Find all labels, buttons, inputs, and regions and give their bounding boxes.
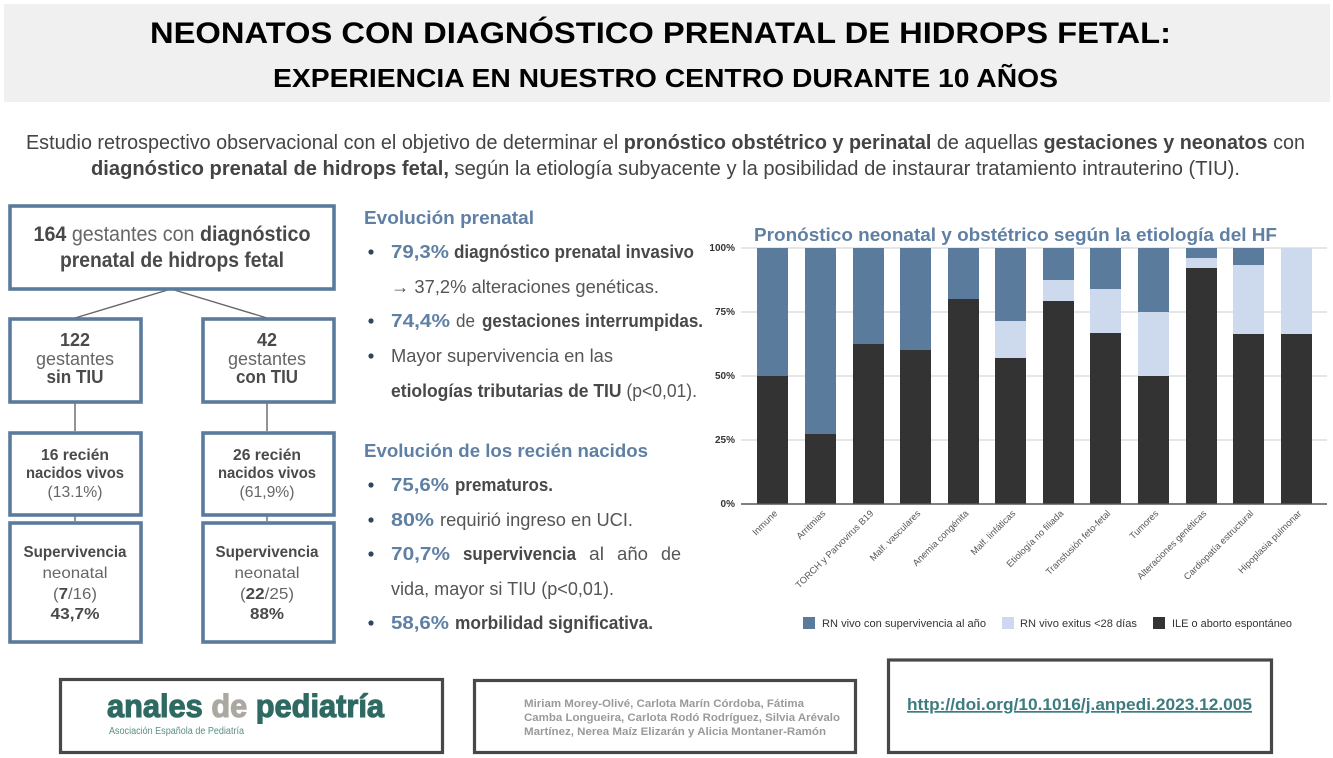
legend [803,617,1292,630]
x axis category labels: Anemia congénita [911,508,971,568]
box: supervivencia con TIU [203,523,334,642]
box: 122 sin TIU: gestantes [36,349,114,369]
box: supervivencia con TIU: (22/25) [240,586,294,603]
x axis category labels: Inmune [750,508,779,537]
heading: evolución recién nacidos: Evolución de los recién nacidos [364,441,648,461]
y axis and gridlines: 75% [715,307,735,318]
bullet list: recién nacidos: 58,6% [391,613,449,633]
legend: ILE o aborto espontáneo [1172,618,1292,630]
x axis category labels [750,508,1303,590]
x axis category labels: Tumores [1128,508,1161,541]
bullet list: prenatal: etiologías tributarias de TIU (p<0,01). [391,381,697,401]
y axis and gridlines [709,243,1327,510]
box: supervivencia sin TIU: neonatal [42,565,108,582]
bullet list: prenatal: Mayor supervivencia en las [391,346,613,366]
stacked bars [757,248,1312,504]
panel: stacked bar chart [709,225,1327,630]
box: 42 con TIU: con TIU [236,367,298,387]
y axis and gridlines: 25% [715,435,735,446]
box: 164 gestantes: 164 gestantes con diagnóstico [34,223,310,246]
box: 122 sin TIU [10,319,141,402]
bullet list: recién nacidos [368,475,681,633]
flow diagram [10,206,334,642]
bullet list: recién nacidos: supervivencia [463,544,577,564]
header band with title [4,4,1330,102]
connectors [75,289,267,521]
y axis and gridlines: 100% [709,243,735,254]
box: 122 sin TIU: sin TIU [46,367,104,387]
bullet list: recién nacidos: requirió ingreso en UCI. [440,510,633,530]
x axis category labels: Etiología no filiada [1005,508,1066,569]
y axis and gridlines: 0% [721,499,735,510]
footer: authors box: Miriam Morey-Olivé, Carlota Marín Córdoba, Fátima [524,698,805,710]
x axis category labels: Transfusión feto-fetal [1044,508,1112,577]
bullet list: prenatal [368,242,703,401]
y axis and gridlines: 50% [715,371,735,382]
box: 122 sin TIU: 122 [60,330,90,350]
x axis category labels: TORCH y Parvovirus B19 [794,508,875,590]
chart title: Pronóstico neonatal y obstétrico según la etiología del HF [754,225,1277,245]
bullet list: recién nacidos: vida, mayor si TIU (p<0,01). [391,579,614,599]
panel: evolución de los recién nacidos [364,441,681,633]
footer: DOI box: http://doi.org/10.1016/j.anpedi.2023.12.005 [907,695,1252,714]
bullet list: prenatal: diagnóstico prenatal invasivo [454,242,694,262]
logo wordmark: anales de pediatría [107,688,384,724]
box: supervivencia con TIU: Supervivencia [216,544,319,561]
box: supervivencia sin TIU: (7/16) [53,586,97,603]
intro text: diagnóstico prenatal de hidrops fetal, según la etiología subyacente y la posibilidad de instaurar tratamiento intrauterino (TIU). [91,158,1240,180]
x axis category labels: Alteraciones genéticas [1135,508,1209,582]
legend: RN vivo exitus <28 días [1020,618,1137,630]
panel: evolución prenatal [364,208,703,401]
x axis category labels: Cardiopatía estructural [1182,508,1255,582]
bullet list: recién nacidos: de [661,544,681,564]
bullet list: prenatal: 79,3% [391,242,449,262]
bullet list: recién nacidos: al [589,544,604,564]
footer: authors box: Martínez, Nerea Maíz Elizarán y Alicia Montaner-Ramón [524,726,826,738]
intro text: Estudio retrospectivo observacional con el objetivo de determinar el pronóstico obstétrico y perinatal de aquellas gestaciones y neonatos con [26,132,1305,154]
box: supervivencia sin TIU: Supervivencia [24,544,127,561]
box: 26 recién nacidos vivos: 26 recién [233,447,301,464]
bullet list: prenatal: de [456,311,475,331]
box: 42 con TIU: gestantes [228,349,306,369]
box: 16 recién nacidos vivos: 16 recién [41,447,109,464]
footer: journal logo box [60,680,442,752]
box: 26 recién nacidos vivos [203,433,334,515]
bullet list: recién nacidos: prematuros. [455,475,553,495]
box: 42 con TIU [203,319,334,402]
bullet list: prenatal: → 37,2% alteraciones genéticas. [391,277,659,297]
box: 16 recién nacidos vivos: nacidos vivos [26,465,124,482]
logo tagline: Asociación Española de Pediatría [109,726,244,737]
box: 164 gestantes: prenatal de hidrops fetal [60,249,284,272]
bullet list: recién nacidos: 75,6% [391,475,449,495]
box: 16 recién nacidos vivos [10,433,141,515]
intro text [26,132,1305,180]
box: 26 recién nacidos vivos: (61,9%) [240,484,294,501]
bullet list: prenatal: 74,4% [391,311,450,331]
box: 16 recién nacidos vivos: (13.1%) [48,484,102,501]
title: NEONATOS CON DIAGNÓSTICO PRENATAL DE HIDROPS FETAL: [150,16,1171,50]
bullet list: recién nacidos: 70,7% [391,544,450,564]
box: supervivencia sin TIU: 43,7% [50,606,100,623]
x axis category labels: Malf. vasculares [868,508,923,563]
heading: evolución prenatal: Evolución prenatal [364,208,534,228]
box: supervivencia con TIU: 88% [250,606,284,623]
box: supervivencia sin TIU [10,523,141,642]
box: 26 recién nacidos vivos: nacidos vivos [218,465,316,482]
bullet list: recién nacidos: 80% [391,510,434,530]
x axis category labels: Hipoplasia pulmonar [1236,508,1303,575]
footer: authors box: Camba Longueira, Carlota Rodó Rodríguez, Silvia Arévalo [524,712,840,724]
legend: RN vivo con supervivencia al año [822,618,986,630]
x axis category labels: Malf. linfáticas [969,508,1018,557]
box: supervivencia con TIU: neonatal [234,565,300,582]
bullet list: prenatal: gestaciones interrumpidas. [482,311,703,331]
footer: authors box [474,680,856,752]
subtitle: EXPERIENCIA EN NUESTRO CENTRO DURANTE 10 AÑOS [273,63,1058,93]
bullet list: recién nacidos: morbilidad significativa. [455,613,653,633]
bullet list: recién nacidos: año [617,544,648,564]
box: 42 con TIU: 42 [257,330,277,350]
footer: DOI box [888,660,1272,752]
box: 164 gestantes [10,206,334,289]
x axis category labels: Arritmias [794,508,828,541]
